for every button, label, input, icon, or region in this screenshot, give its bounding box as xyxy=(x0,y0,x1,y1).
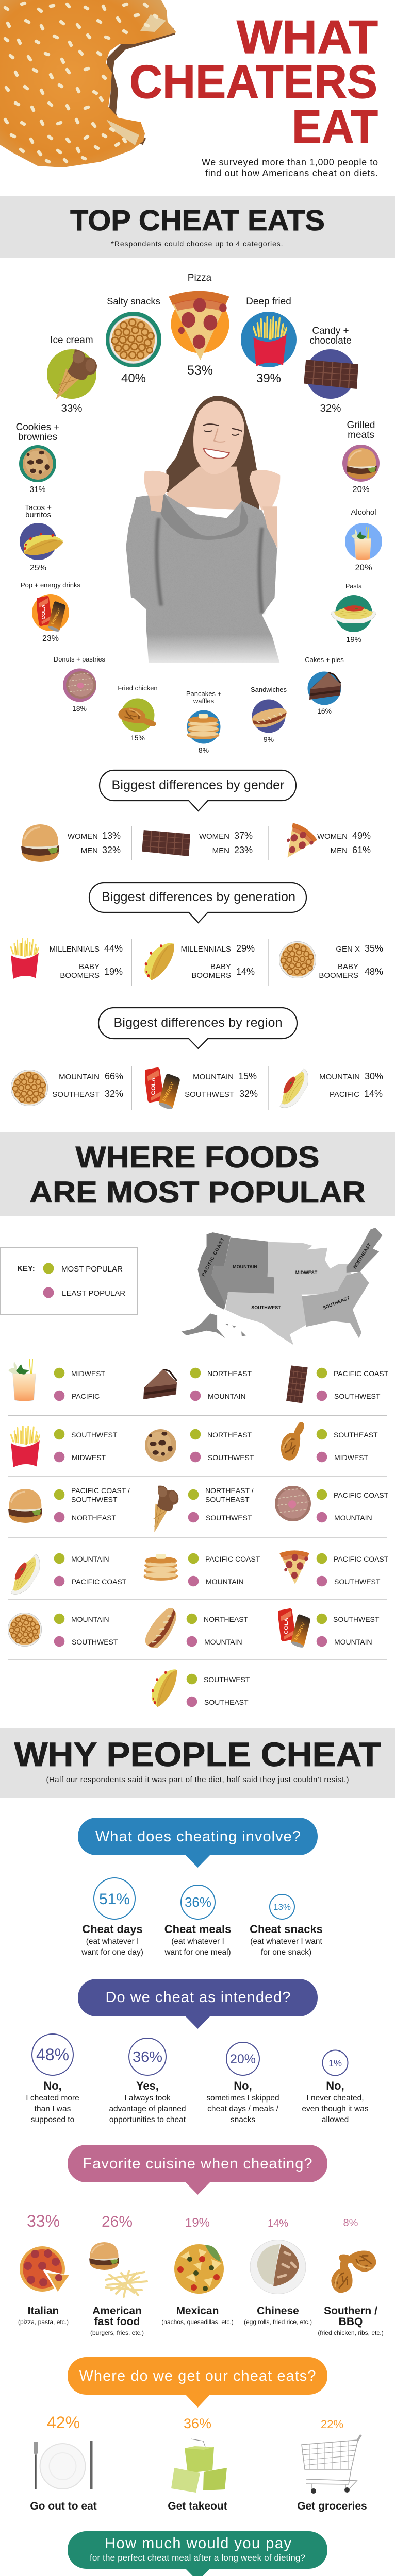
region row 3: burger, ice cream, donut xyxy=(8,1482,389,1532)
taco comparison xyxy=(144,943,255,980)
region row 6: tacos: SOUTHEAST xyxy=(204,1698,249,1706)
burger regions: SOUTHWEST xyxy=(71,1495,118,1503)
drinks comparison xyxy=(144,1067,258,1111)
food item: pizza 53% xyxy=(169,273,229,378)
pizza comparison xyxy=(275,821,371,866)
cuisine: italian 33% xyxy=(18,2212,71,2326)
callout: differences by region xyxy=(98,1008,297,1048)
region row 1: drinks, cake, chocolate xyxy=(8,1359,389,1403)
source: go out to eat 42%: Go out to eat xyxy=(30,2500,97,2512)
map of US regions: NORTHEAST xyxy=(352,1242,372,1269)
food item: candy and chocolate 32% xyxy=(304,326,358,414)
stat: no, cheated more 48% xyxy=(26,2034,79,2124)
fries comparison: MILLENNIALS xyxy=(49,945,100,954)
pancakes regions: MOUNTAIN xyxy=(206,1578,244,1586)
food item: cookies and brownies 31%: Cookies + xyxy=(15,422,60,433)
food item: sandwiches 9% xyxy=(251,686,287,743)
food item: grilled meats 20%: meats xyxy=(348,430,374,440)
stat: yes, planned 36%: advantage of planned xyxy=(109,2105,186,2113)
section heading band: why people cheat xyxy=(0,1728,395,1798)
region row 5: pretzels, sandwich, drinks xyxy=(8,1605,380,1652)
stat: cheat days 51%: Cheat days xyxy=(82,1923,143,1936)
pasta comparison: PACIFIC xyxy=(330,1090,359,1099)
alcohol regions xyxy=(8,1359,106,1401)
cuisine: american fast food 26%: fast food xyxy=(94,2316,140,2328)
fries regions: MIDWEST xyxy=(72,1453,106,1462)
food item: fried chicken 15%: Fried chicken xyxy=(118,684,158,692)
stat: no, skipped 20%: No, xyxy=(234,2079,252,2092)
fries comparison: 19% xyxy=(104,967,123,977)
fried chicken regions: SOUTHEAST xyxy=(334,1431,378,1439)
icon: rice plate xyxy=(250,2240,306,2294)
stat: yes, planned 36%: Yes, xyxy=(136,2079,159,2092)
food item: pancakes and waffles 8%: waffles xyxy=(193,697,215,705)
stat: cheat meals 36%: Cheat meals xyxy=(164,1923,231,1936)
stat: cheat meals 36%: want for one meal) xyxy=(164,1948,231,1957)
drinks comparison: SOUTHWEST xyxy=(185,1090,234,1099)
cuisine: mexican 19% xyxy=(161,2216,234,2326)
chocolate comparison: 23% xyxy=(234,845,253,855)
food item: ice cream 33%: Ice cream xyxy=(50,335,93,346)
food item: pop and energy drinks 23%: 23% xyxy=(42,634,59,643)
taco comparison: BOOMERS xyxy=(191,971,231,980)
food item: deep fried 39% xyxy=(241,296,297,385)
stat: no, skipped 20%: sometimes I skipped xyxy=(206,2094,279,2103)
icon: plate and cutlery xyxy=(34,2441,91,2489)
pizza regions: SOUTHWEST xyxy=(334,1578,381,1586)
food item: cakes and pies 16% xyxy=(305,656,344,715)
source: get takeout 36% xyxy=(168,2416,227,2512)
callout: differences by generation xyxy=(89,883,306,923)
taco comparison: 14% xyxy=(236,967,255,977)
food item: pancakes and waffles 8% xyxy=(186,690,221,754)
map key xyxy=(0,1248,138,1314)
stat: yes, planned 36% xyxy=(109,2038,186,2124)
food item: pasta 19% xyxy=(331,583,376,644)
food item: pasta 19%: 19% xyxy=(346,635,361,644)
section heading band: where foods are most popular: WHERE FOODS xyxy=(75,1141,320,1174)
chocolate comparison: 37% xyxy=(234,831,253,841)
food item: candy and chocolate 32%: chocolate xyxy=(309,335,352,346)
food item: fried chicken 15% xyxy=(118,684,158,742)
chocolate comparison: WOMEN xyxy=(199,832,229,841)
pretzels regions: SOUTHWEST xyxy=(72,1638,118,1646)
sandwich regions: MOUNTAIN xyxy=(204,1638,242,1646)
region row 2: fries, cookies, fried chicken xyxy=(11,1422,378,1467)
region: southeast xyxy=(302,1272,369,1338)
source: get groceries 22%: 22% xyxy=(321,2418,343,2431)
fries regions xyxy=(11,1427,118,1467)
cuisine: southern bbq 8% xyxy=(318,2217,384,2336)
cuisine: american fast food 26%: American xyxy=(92,2305,142,2317)
sandwich regions: NORTHEAST xyxy=(204,1615,249,1623)
stat: no, never cheated 1% xyxy=(302,2050,369,2124)
pasta comparison xyxy=(274,1064,383,1113)
stat: yes, planned 36%: opportunities to cheat xyxy=(109,2115,186,2124)
question bubble: where do we get cheat eats xyxy=(68,2357,327,2408)
food item: tacos and burritos 25%: burritos xyxy=(25,511,51,519)
donut regions: PACIFIC COAST xyxy=(334,1491,389,1499)
food item: tacos and burritos 25% xyxy=(19,503,64,572)
sandwich regions xyxy=(138,1605,249,1652)
pasta regions: MOUNTAIN xyxy=(71,1555,109,1563)
pasta comparison: 14% xyxy=(364,1089,383,1099)
pizza comparison: MEN xyxy=(331,846,348,855)
question bubble: how much would you pay xyxy=(68,2531,327,2576)
pizza regions xyxy=(279,1550,389,1586)
cookie regions xyxy=(145,1429,254,1462)
region row 6: tacos: SOUTHWEST xyxy=(204,1675,250,1684)
stat: no, never cheated 1%: 1% xyxy=(328,2058,342,2069)
ice cream regions: SOUTHEAST xyxy=(205,1495,250,1503)
pizza comparison: WOMEN xyxy=(317,832,348,841)
pretzels comparison: 32% xyxy=(105,1089,123,1099)
food item: candy and chocolate 32%: Candy + xyxy=(312,326,349,336)
food item: grilled meats 20%: 20% xyxy=(352,485,370,494)
section heading band: top cheat eats: TOP CHEAT EATS xyxy=(70,204,325,237)
stat: cheat snacks 13%: 13% xyxy=(273,1902,291,1912)
food item: grilled meats 20%: Grilled xyxy=(347,420,375,431)
ice cream regions xyxy=(144,1482,254,1532)
map of US regions: PACIFIC COAST xyxy=(201,1237,225,1277)
food item: donuts and pastries 18% xyxy=(54,655,105,713)
section heading band: top cheat eats xyxy=(0,196,395,258)
taco comparison: 29% xyxy=(236,943,255,954)
pizza comparison: 61% xyxy=(352,845,371,855)
food item: candy and chocolate 32%: 32% xyxy=(320,402,341,414)
stat: no, cheated more 48%: than I was xyxy=(35,2105,71,2113)
region comparison row xyxy=(11,1064,383,1113)
food item: salty snacks 40%: Salty snacks xyxy=(107,296,160,307)
icon: fried chicken pieces xyxy=(322,2241,380,2296)
food item: salty snacks 40%: 40% xyxy=(121,371,146,385)
pretzels regions xyxy=(8,1613,118,1647)
food item: pop and energy drinks 23%: Pop + energy drinks xyxy=(21,581,80,589)
generation comparison row xyxy=(11,939,383,986)
food item: cookies and brownies 31%: 31% xyxy=(29,485,46,494)
food item: deep fried 39%: Deep fried xyxy=(246,296,291,307)
pancakes regions: PACIFIC COAST xyxy=(205,1555,260,1563)
cuisine: american fast food 26%: (burgers, fries, etc.) xyxy=(90,2329,144,2336)
food item: ice cream 33%: 33% xyxy=(61,402,83,414)
section heading band: where foods are most popular: ARE MOST POPULAR xyxy=(29,1176,366,1209)
stat: cheat meals 36%: 36% xyxy=(185,1894,211,1910)
food item: alcohol 20%: Alcohol xyxy=(351,508,376,517)
burger regions: PACIFIC COAST / xyxy=(71,1486,130,1495)
pancakes regions xyxy=(144,1553,260,1586)
map of US regions: MIDWEST xyxy=(295,1270,318,1275)
cuisine: chinese 14%: 14% xyxy=(268,2218,288,2229)
taco comparison: MILLENNIALS xyxy=(180,945,231,954)
source: get groceries 22% xyxy=(297,2418,367,2512)
food item: cookies and brownies 31%: brownies xyxy=(18,432,57,443)
burger comparison: WOMEN xyxy=(68,832,98,841)
chocolate comparison: MEN xyxy=(212,846,229,855)
callout: differences by generation: Biggest differences by generation xyxy=(102,890,295,904)
burger regions: NORTHEAST xyxy=(72,1514,117,1522)
stat: no, cheated more 48%: I cheated more xyxy=(26,2094,79,2103)
cuisine: mexican 19%: (nachos, quesadillas, etc.) xyxy=(161,2318,234,2326)
region row 4: pasta, pancakes, pizza xyxy=(5,1550,389,1600)
taco comparison: BABY xyxy=(210,962,231,971)
section heading band: why people cheat: (Half our respondents said it was part of the diet, half said they just couldn't resist.) xyxy=(46,1775,349,1784)
drinks regions: MOUNTAIN xyxy=(334,1638,372,1646)
pretzels comparison xyxy=(11,1070,123,1106)
burger comparison: 13% xyxy=(102,831,121,841)
cake regions: NORTHEAST xyxy=(207,1369,252,1378)
food item: fried chicken 15%: 15% xyxy=(130,734,145,742)
cuisine: southern bbq 8%: Southern / xyxy=(324,2305,377,2317)
pretzels comparison: 48% xyxy=(365,967,383,977)
cake regions xyxy=(143,1368,252,1401)
stat: cheat days 51% xyxy=(81,1878,143,1957)
stat: no, skipped 20%: snacks xyxy=(231,2115,255,2124)
stat: no, skipped 20%: cheat days / meals / xyxy=(207,2105,279,2113)
food item: grilled meats 20% xyxy=(342,420,380,494)
stat: no, cheated more 48%: No, xyxy=(43,2079,62,2092)
region: southwest xyxy=(225,1292,306,1345)
pasta regions xyxy=(5,1550,127,1600)
title xyxy=(129,11,378,153)
ice cream regions: NORTHEAST / xyxy=(205,1486,254,1495)
cuisine: southern bbq 8%: (fried chicken, ribs, etc.) xyxy=(318,2329,384,2336)
pasta regions: PACIFIC COAST xyxy=(72,1578,127,1586)
source: go out to eat 42% xyxy=(30,2413,97,2512)
question bubble: how much would you pay: for the perfect cheat meal after a long week of dieting? xyxy=(90,2553,305,2563)
stat: cheat days 51%: want for one day) xyxy=(81,1948,143,1957)
drinks comparison: MOUNTAIN xyxy=(193,1073,234,1081)
title: CHEATERS xyxy=(129,56,377,108)
burger bun hero image xyxy=(0,0,176,167)
stat: cheat meals 36% xyxy=(164,1885,231,1957)
intro text: find out how Americans cheat on diets. xyxy=(205,168,378,178)
stat: no, never cheated 1%: No, xyxy=(326,2079,344,2092)
pretzels comparison: GEN X xyxy=(336,945,360,954)
cuisine: italian 33%: (pizza, pasta, etc.) xyxy=(18,2318,69,2326)
cuisine: italian 33%: 33% xyxy=(27,2212,60,2230)
icon: nachos xyxy=(174,2244,224,2294)
stat: no, never cheated 1%: even though it was xyxy=(302,2105,369,2113)
cuisine: chinese 14%: Chinese xyxy=(257,2305,299,2317)
food item: cakes and pies 16%: 16% xyxy=(317,707,332,715)
chocolate comparison xyxy=(142,830,253,856)
woman photo xyxy=(123,396,300,663)
title: WHAT xyxy=(237,11,378,63)
map of US regions: SOUTHEAST xyxy=(322,1295,351,1311)
pretzels comparison: MOUNTAIN xyxy=(59,1073,100,1081)
pretzels regions: MOUNTAIN xyxy=(71,1615,109,1623)
region: northeast xyxy=(347,1228,383,1273)
cookie regions: SOUTHWEST xyxy=(208,1453,254,1462)
food item: donuts and pastries 18%: Donuts + pastries xyxy=(54,655,105,663)
region: midwest xyxy=(268,1242,351,1295)
question bubble: favorite cuisine xyxy=(68,2145,327,2195)
stat: cheat snacks 13% xyxy=(250,1894,323,1957)
cuisine: mexican 19%: Mexican xyxy=(176,2305,219,2317)
food item: tacos and burritos 25%: 25% xyxy=(30,564,46,572)
stat: cheat snacks 13%: Cheat snacks xyxy=(250,1923,323,1936)
food item: alcohol 20% xyxy=(345,508,382,572)
question bubble: what does cheating involve: What does cheating involve? xyxy=(95,1828,301,1845)
stat: no, never cheated 1%: I never cheated, xyxy=(306,2094,364,2103)
drinks comparison: 15% xyxy=(238,1071,257,1081)
stat: no, cheated more 48%: supposed to xyxy=(31,2115,74,2124)
intro text xyxy=(202,157,378,178)
stat: cheat meals 36%: (eat whatever I xyxy=(171,1937,224,1946)
cuisine: italian 33%: Italian xyxy=(28,2305,59,2317)
stat: no, skipped 20%: 20% xyxy=(230,2052,256,2066)
cuisine: american fast food 26%: 26% xyxy=(102,2213,133,2230)
food item: pizza 53%: Pizza xyxy=(188,273,212,283)
stat: no, never cheated 1%: allowed xyxy=(322,2115,349,2124)
icon: shopping cart xyxy=(302,2435,361,2494)
map of US regions xyxy=(182,1228,383,1345)
icon: takeout boxes xyxy=(171,2439,227,2493)
food item: donuts and pastries 18%: 18% xyxy=(72,704,87,713)
donut regions xyxy=(275,1486,389,1522)
chocolate regions xyxy=(286,1365,389,1403)
burger comparison: 32% xyxy=(102,845,121,855)
source: go out to eat 42%: 42% xyxy=(47,2413,80,2432)
cookie regions: NORTHEAST xyxy=(207,1431,252,1439)
stat: no, skipped 20% xyxy=(206,2042,279,2124)
ice cream regions: SOUTHWEST xyxy=(206,1514,252,1522)
donut regions: MOUNTAIN xyxy=(334,1514,372,1522)
pasta comparison: MOUNTAIN xyxy=(319,1073,360,1081)
region row 6: tacos xyxy=(152,1669,250,1707)
gender comparison row xyxy=(21,821,371,866)
chocolate regions: SOUTHWEST xyxy=(334,1392,381,1400)
cuisine: american fast food 26% xyxy=(89,2213,147,2336)
question bubble: favorite cuisine: Favorite cuisine when cheating? xyxy=(83,2156,312,2172)
question bubble: do we cheat as intended: Do we cheat as intended? xyxy=(105,1989,291,2006)
stat: yes, planned 36%: 36% xyxy=(133,2049,162,2065)
section heading band: top cheat eats: *Respondents could choose up to 4 categories. xyxy=(111,240,283,248)
title: EAT xyxy=(292,101,378,153)
source: get takeout 36%: Get takeout xyxy=(168,2500,227,2512)
stat: no, cheated more 48%: 48% xyxy=(36,2045,69,2064)
region: pacific coast xyxy=(198,1232,231,1310)
food item: sandwiches 9%: Sandwiches xyxy=(251,686,287,693)
food item: pasta 19%: Pasta xyxy=(345,583,362,590)
cake regions: MOUNTAIN xyxy=(208,1392,246,1400)
pretzels comparison: 66% xyxy=(105,1071,123,1081)
alcohol regions: MIDWEST xyxy=(71,1369,106,1378)
stat: cheat snacks 13%: for one snack) xyxy=(261,1948,311,1957)
intro text: We surveyed more than 1,000 people to xyxy=(202,157,378,167)
fried chicken regions xyxy=(281,1422,378,1462)
food item: ice cream 33% xyxy=(47,335,97,414)
burger comparison xyxy=(21,824,121,862)
drinks regions: SOUTHWEST xyxy=(333,1615,380,1623)
source: get takeout 36%: 36% xyxy=(184,2416,211,2431)
region: mountain xyxy=(211,1237,274,1305)
food item: deep fried 39%: 39% xyxy=(256,371,281,385)
food item: alcohol 20%: 20% xyxy=(355,563,372,572)
stat: cheat snacks 13%: (eat whatever I want xyxy=(250,1937,322,1946)
pretzels comparison xyxy=(279,941,383,980)
food item: pizza 53%: 53% xyxy=(187,363,213,378)
pretzels comparison: SOUTHEAST xyxy=(52,1090,100,1099)
food item: cookies and brownies 31% xyxy=(15,422,60,494)
map key: LEAST POPULAR xyxy=(62,1289,125,1298)
pizza comparison: 49% xyxy=(352,831,371,841)
fries comparison: BOOMERS xyxy=(60,971,100,980)
map key: MOST POPULAR xyxy=(61,1265,123,1274)
food item: sandwiches 9%: 9% xyxy=(264,735,274,743)
fries comparison: 44% xyxy=(104,943,123,954)
pretzels comparison: 35% xyxy=(365,943,383,954)
cuisine: chinese 14%: (egg rolls, fried rice, etc.) xyxy=(244,2318,312,2326)
question bubble: how much would you pay: How much would you pay xyxy=(105,2535,292,2552)
food item: salty snacks 40% xyxy=(106,296,161,385)
food item: pop and energy drinks 23% xyxy=(21,581,80,643)
cuisine: southern bbq 8%: 8% xyxy=(343,2217,358,2229)
pasta comparison: 30% xyxy=(365,1071,383,1081)
pizza regions: PACIFIC COAST xyxy=(334,1555,389,1563)
map of US regions: MOUNTAIN xyxy=(233,1264,257,1269)
hawaii xyxy=(225,1324,246,1336)
map of US regions: SOUTHWEST xyxy=(251,1305,281,1310)
section heading band: where foods are most popular xyxy=(0,1132,395,1216)
stat: yes, planned 36%: I always took xyxy=(124,2094,171,2103)
callout: differences by gender: Biggest differences by gender xyxy=(111,778,285,792)
food item: tacos and burritos 25%: Tacos + xyxy=(25,503,52,512)
icon: pizza pie xyxy=(20,2246,71,2294)
icon: burger and fries xyxy=(89,2242,147,2297)
pretzels comparison: BABY xyxy=(338,962,358,971)
food item: pancakes and waffles 8%: 8% xyxy=(199,746,209,754)
burger comparison: MEN xyxy=(81,846,98,855)
cuisine: southern bbq 8%: BBQ xyxy=(339,2316,363,2328)
fries regions: SOUTHWEST xyxy=(71,1431,118,1439)
fried chicken regions: MIDWEST xyxy=(334,1453,369,1462)
question bubble: what does cheating involve xyxy=(78,1818,318,1868)
alcohol regions: PACIFIC xyxy=(72,1392,100,1400)
question bubble: do we cheat as intended xyxy=(78,1979,318,2029)
fries comparison xyxy=(11,939,123,980)
burger regions xyxy=(8,1486,130,1523)
source: get groceries 22%: Get groceries xyxy=(297,2500,367,2512)
question bubble: where do we get cheat eats: Where do we get our cheat eats? xyxy=(79,2368,316,2384)
food item: pancakes and waffles 8%: Pancakes + xyxy=(186,690,221,698)
alaska xyxy=(182,1313,225,1338)
stat: cheat days 51%: 51% xyxy=(99,1891,130,1908)
fries comparison: BABY xyxy=(79,962,100,971)
callout: differences by region: Biggest differences by region xyxy=(113,1015,283,1030)
food item: cakes and pies 16%: Cakes + pies xyxy=(305,656,344,664)
cuisine: chinese 14% xyxy=(244,2218,312,2326)
map key: KEY: xyxy=(17,1264,35,1273)
drinks regions xyxy=(277,1608,380,1649)
cuisine: mexican 19%: 19% xyxy=(185,2216,210,2230)
stat: cheat days 51%: (eat whatever I xyxy=(86,1937,139,1946)
section heading band: why people cheat: WHY PEOPLE CHEAT xyxy=(14,1735,381,1773)
chocolate regions: PACIFIC COAST xyxy=(334,1369,389,1378)
drinks comparison: 32% xyxy=(239,1089,258,1099)
pretzels comparison: BOOMERS xyxy=(319,971,358,980)
callout: differences by gender xyxy=(100,770,296,811)
